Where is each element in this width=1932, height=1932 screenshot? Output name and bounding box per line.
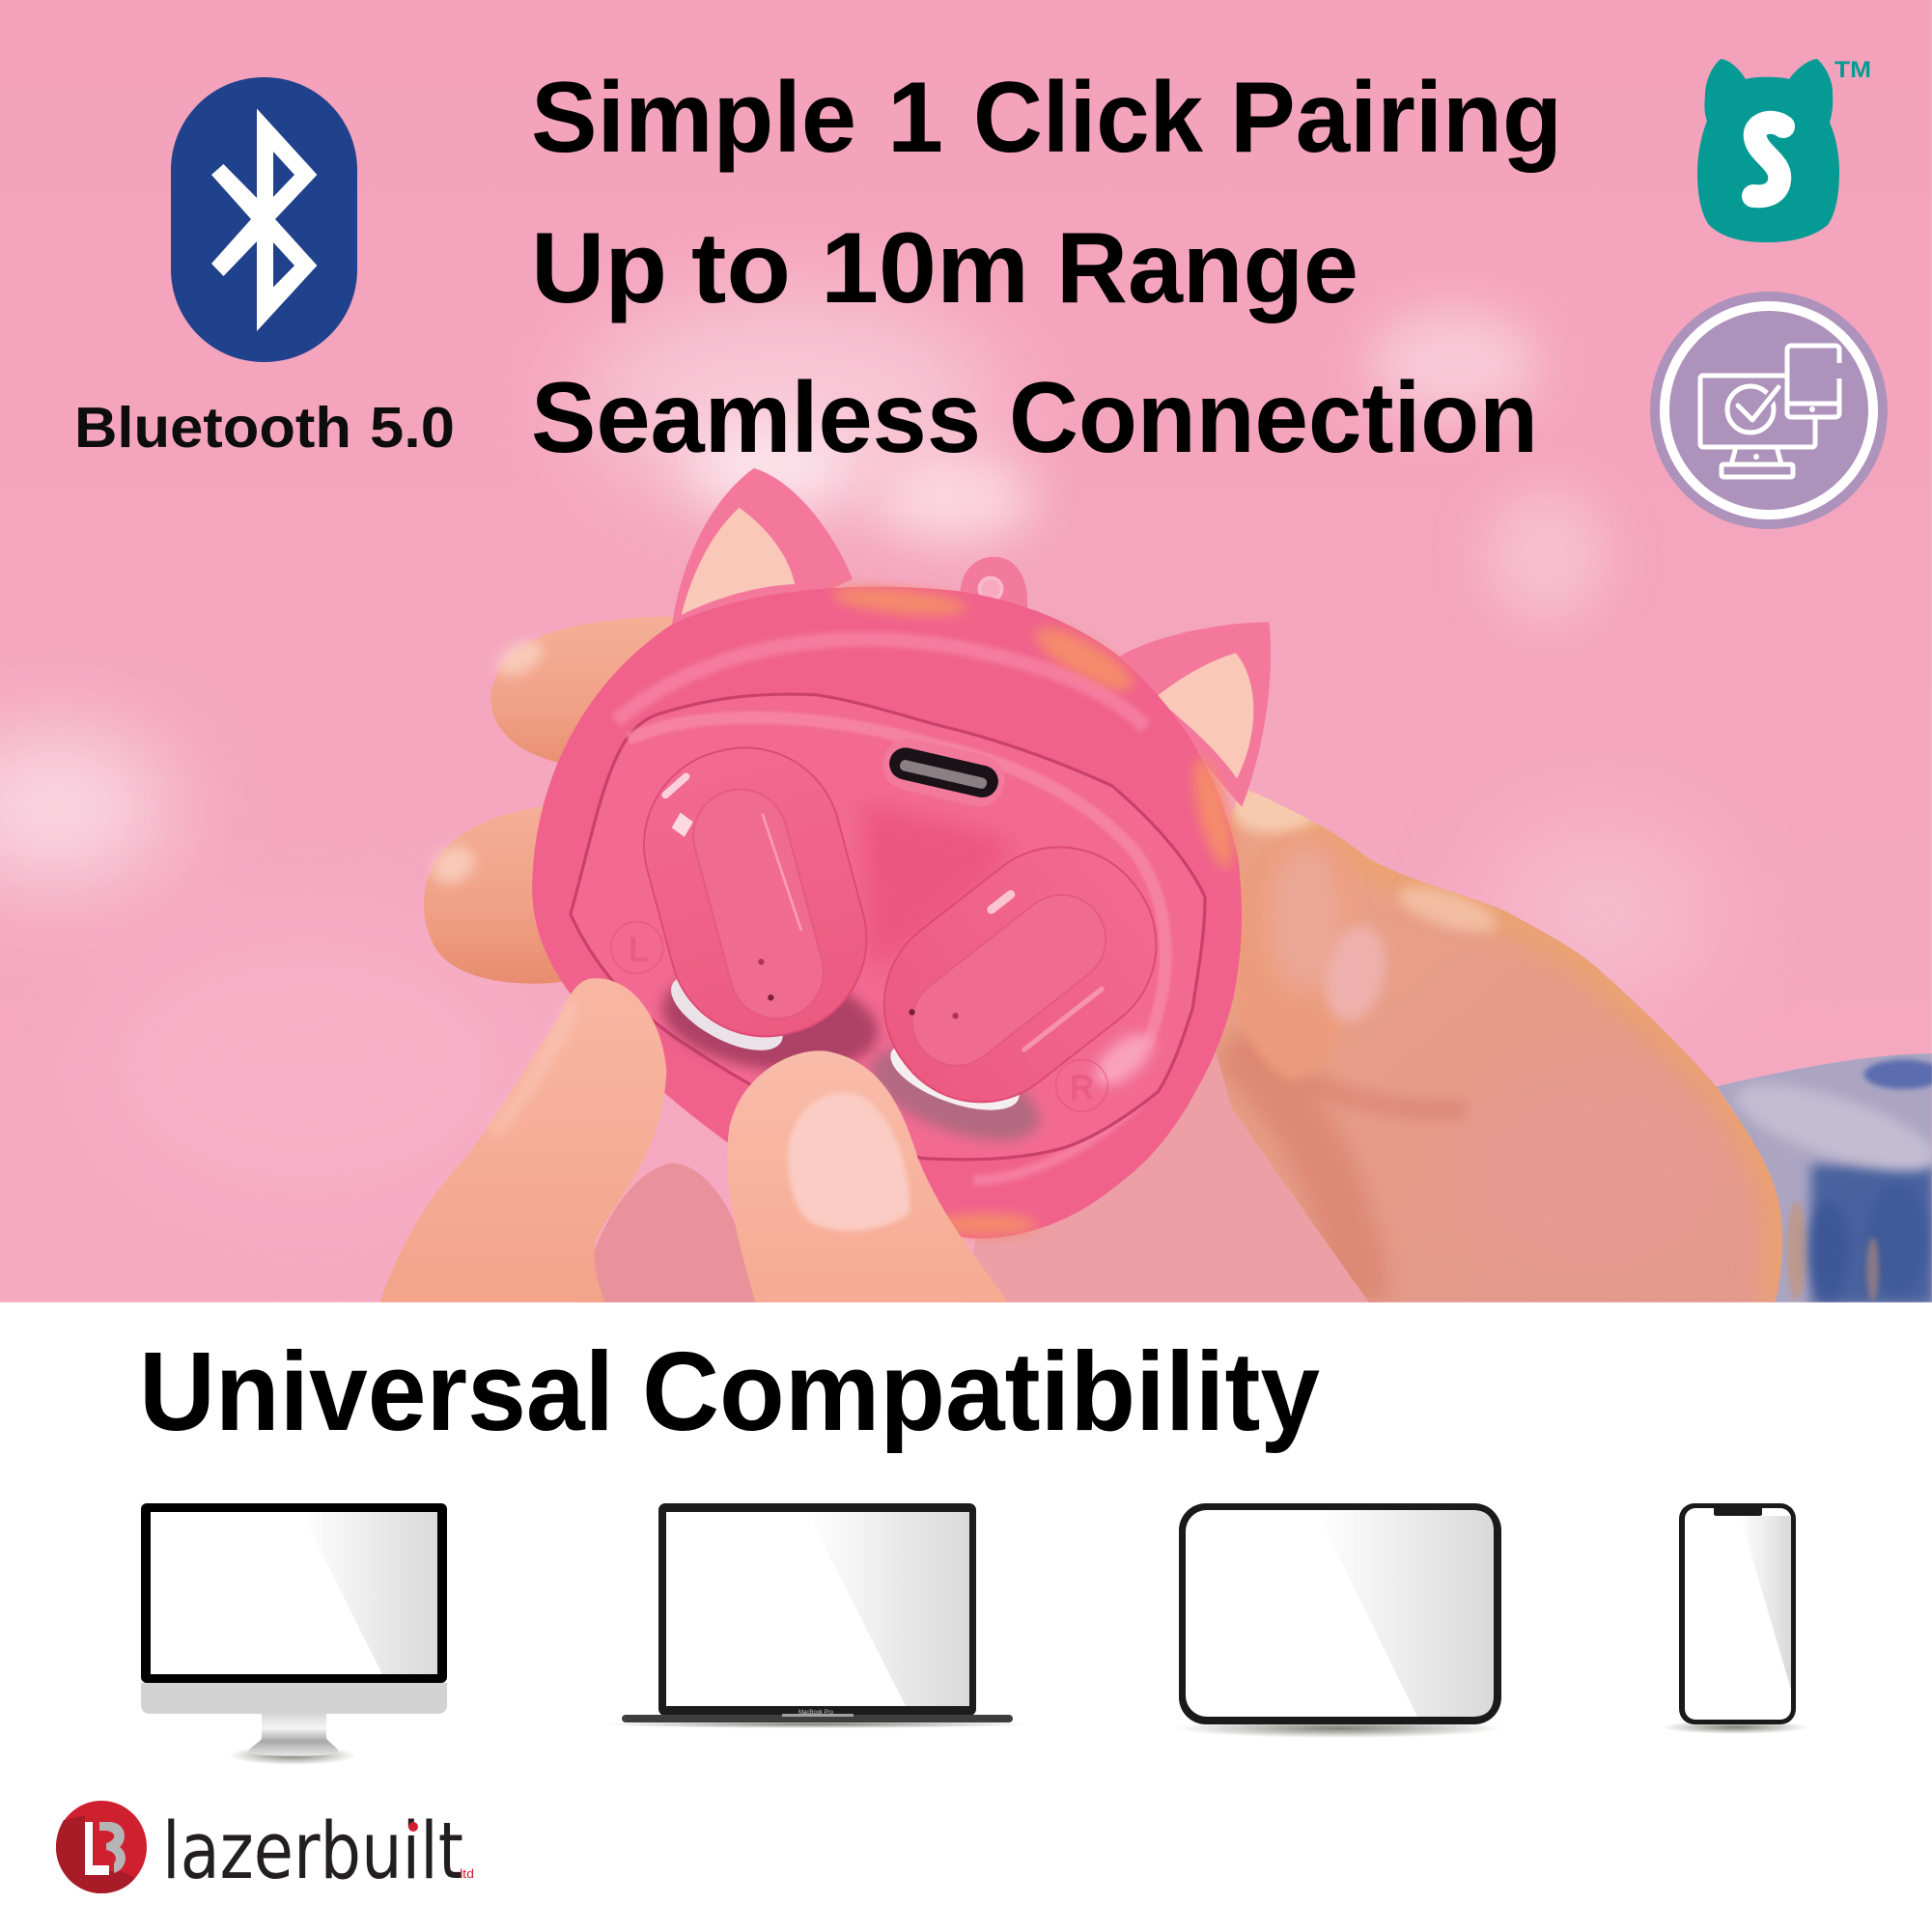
squishmallow style teal logo: [1697, 57, 1871, 242]
charging port: [882, 739, 1004, 807]
heading line: Up to 10m Range: Up: [531, 212, 667, 324]
L and R embossed marks: L: [629, 930, 650, 968]
heading line: Seamless Connection: Seamless: [531, 362, 981, 474]
heading line: Simple 1 Click Pairing: Pairing: [1230, 62, 1562, 174]
heading line: Simple 1 Click Pairing: Simple: [531, 62, 856, 174]
right earbud: [882, 846, 1157, 1103]
right hand and thumb: [1216, 790, 1782, 1302]
heading line: Seamless Connection: [531, 362, 1538, 474]
heading line: Simple 1 Click Pairing: [531, 62, 1562, 174]
case ears and loop: [671, 468, 1271, 807]
label: Bluetooth 5.0: Bluetooth: [74, 396, 351, 460]
front thumb with nail: [727, 1050, 1008, 1302]
L and R embossed marks: R: [1070, 1068, 1095, 1106]
device: desktop monitor: [141, 1503, 447, 1765]
device: smartphone: [1662, 1503, 1808, 1734]
L and R embossed marks: [611, 922, 1107, 1111]
heading line: Seamless Connection: Connection: [1009, 362, 1538, 474]
heading line: Up to 10m Range: 10m: [821, 212, 1029, 324]
palm below case: [962, 1051, 1380, 1302]
heading: Universal Compatibility: Compatibility: [642, 1329, 1320, 1454]
earbud well shadows and foam tips: [657, 977, 1045, 1147]
lazerbuilt logo: lazerbuilt: [162, 1806, 463, 1897]
pink bokeh wall background: [0, 0, 1932, 1302]
label: Bluetooth 5.0: [74, 396, 455, 460]
compatibility badge icon: [1650, 292, 1888, 529]
sleeve: [1713, 1048, 1932, 1306]
heading line: Up to 10m Range: to: [691, 212, 791, 324]
pale fingers behind thumb: [579, 1163, 762, 1302]
heading: Universal Compatibility: Universal: [139, 1329, 614, 1454]
left earbud: [643, 746, 867, 1037]
device: tablet: [1175, 1503, 1503, 1738]
heading line: Simple 1 Click Pairing: Click: [973, 62, 1203, 174]
front index finger: [379, 978, 666, 1302]
label: Bluetooth 5.0: 5.0: [370, 396, 455, 460]
case body: [532, 582, 1242, 1239]
device: laptop: MacBook Pro: [798, 1710, 834, 1716]
left upper finger: [490, 616, 674, 763]
heading: Universal Compatibility: [139, 1329, 1320, 1454]
heading line: Simple 1 Click Pairing: 1: [887, 62, 943, 174]
device: laptop: [602, 1503, 1030, 1728]
heading line: Up to 10m Range: [531, 212, 1358, 324]
heading line: Up to 10m Range: Range: [1056, 212, 1358, 324]
lazerbuilt logo: ltd: [460, 1866, 474, 1881]
bluetooth logo icon: [171, 77, 357, 362]
left middle finger: [423, 807, 562, 984]
photo: hand holding pink cat earbud case: [0, 0, 1932, 1306]
squishmallow style teal logo: TM: [1834, 57, 1871, 83]
lazerbuilt logo: [56, 1801, 474, 1897]
